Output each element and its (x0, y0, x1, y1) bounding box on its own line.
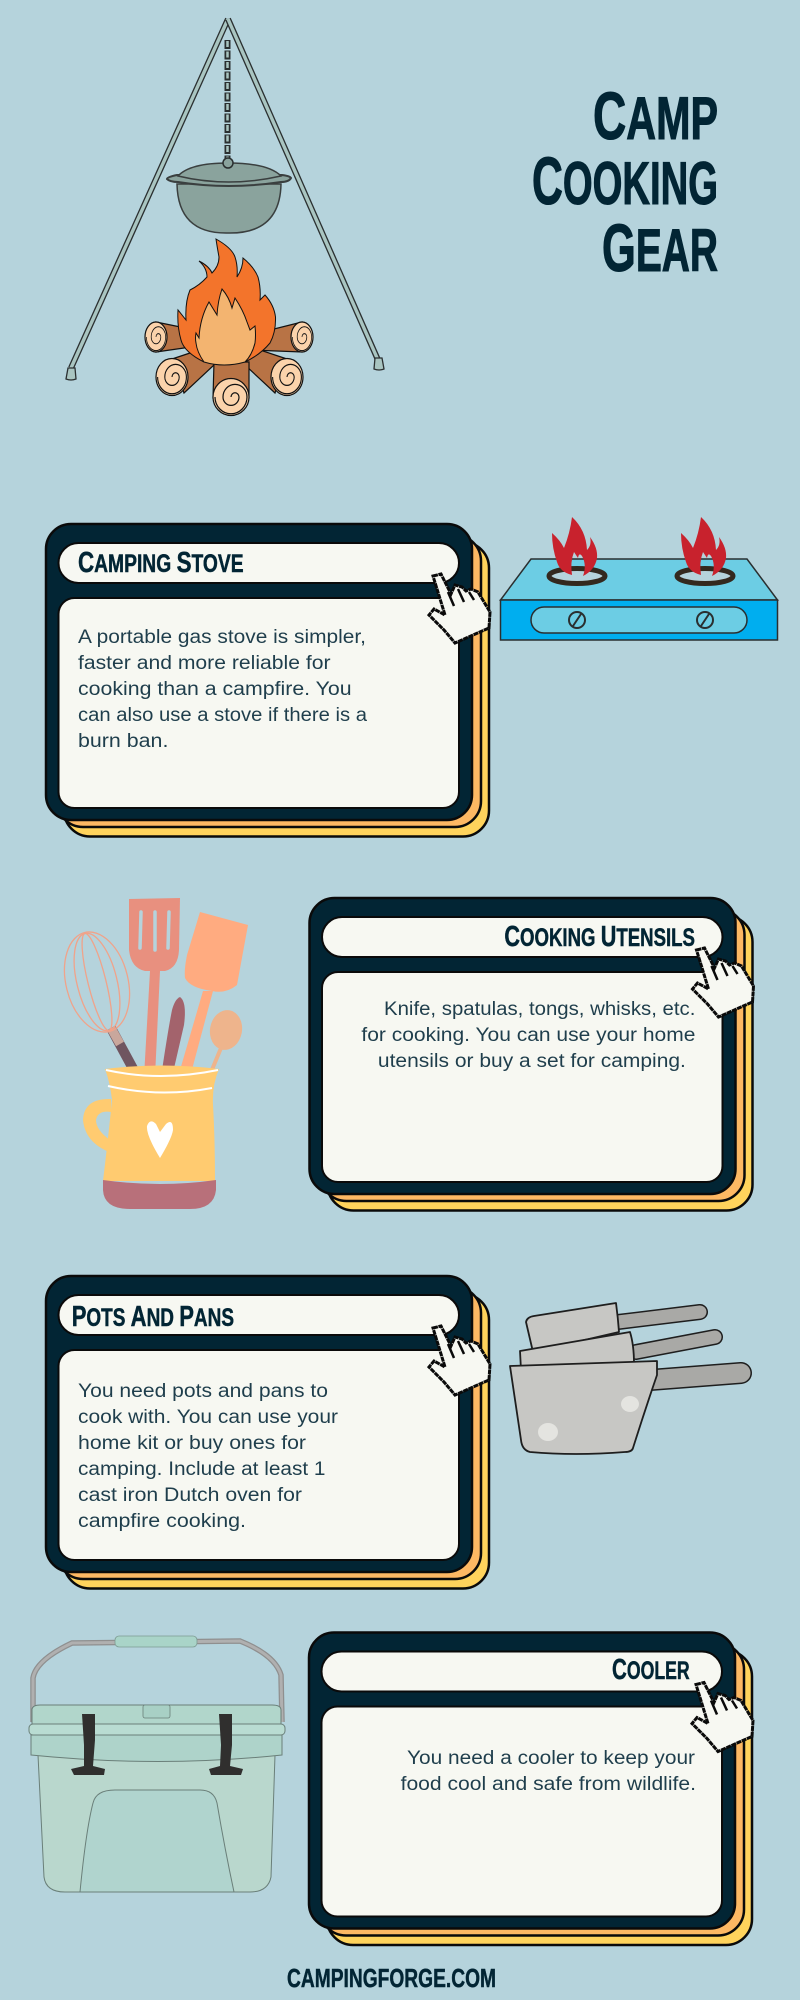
body text: cast iron Dutch oven for (78, 1485, 303, 1506)
body text: campfire cooking. (78, 1511, 246, 1532)
icon: pointer hand (692, 948, 754, 1017)
icon: gas stove (500, 517, 778, 640)
body text: for cooking. You can use your home (361, 1025, 695, 1046)
body text (401, 1748, 696, 1795)
body text: cook with. You can use your (78, 1407, 339, 1428)
small pot (526, 1303, 700, 1352)
title (532, 79, 718, 286)
icon: stacked pots (510, 1303, 741, 1454)
icon: utensils in mug (55, 898, 248, 1209)
front panel (80, 1790, 234, 1892)
body text: burn ban. (78, 731, 168, 752)
peach spatula (178, 912, 248, 1077)
body text: camping. Include at least 1 (78, 1459, 326, 1480)
body text: Knife, spatulas, tongs, whisks, etc. (384, 999, 695, 1020)
body text: cooking than a campfire. You (78, 679, 352, 700)
card frame (309, 1632, 752, 1945)
body text: home kit or buy ones for (78, 1433, 307, 1454)
pot (167, 158, 291, 233)
slotted spatula (129, 898, 180, 1077)
card frame (310, 898, 752, 1210)
latches (71, 1714, 243, 1775)
body text: utensils or buy a set for camping. (378, 1051, 686, 1072)
title: CAMP (593, 79, 718, 154)
large pot (510, 1361, 741, 1454)
body text: You need a cooler to keep your (407, 1748, 696, 1769)
icon: pointer hand (429, 574, 490, 643)
title: GEAR (602, 211, 718, 286)
heart (147, 1121, 173, 1158)
body (38, 1755, 275, 1892)
lower band (31, 1735, 282, 1762)
lid (32, 1705, 281, 1724)
small utensil (161, 997, 185, 1077)
panel: cooler (309, 1632, 753, 1945)
mug (83, 1066, 219, 1209)
body text: A portable gas stove is simpler, (78, 627, 366, 648)
tripod (66, 19, 384, 380)
body text (78, 627, 367, 752)
icon: pointer hand (692, 1682, 753, 1752)
heading: POTS AND PANS (72, 1301, 234, 1333)
panel: camping stove (46, 524, 490, 836)
body text: can also use a stove if there is a (78, 705, 367, 726)
icon: pointer hand (429, 1326, 490, 1395)
spoon (207, 1008, 245, 1077)
icon: cooler (29, 1636, 285, 1892)
body text (78, 1381, 339, 1532)
panel: cooking utensils (310, 898, 754, 1210)
logs (145, 322, 313, 416)
footer: CAMPINGFORGE.COM (287, 1963, 496, 1993)
heading: COOKING UTENSILS (504, 921, 695, 953)
title: COOKING (532, 144, 718, 219)
heading: CAMPING STOVE (78, 547, 244, 579)
card frame (46, 524, 489, 836)
middle pot (520, 1332, 715, 1370)
body text: faster and more reliable for (78, 653, 331, 674)
body text: food cool and safe from wildlife. (401, 1774, 696, 1795)
body text (361, 999, 695, 1072)
whisk (55, 925, 139, 1076)
chain (224, 40, 230, 160)
card frame (46, 1276, 489, 1588)
panel: pots and pans (46, 1276, 490, 1588)
flame (178, 239, 276, 365)
heading: COOLER (612, 1654, 690, 1686)
body text: You need pots and pans to (78, 1381, 328, 1402)
icon: campfire tripod with pot (66, 19, 384, 416)
handle (33, 1636, 282, 1722)
